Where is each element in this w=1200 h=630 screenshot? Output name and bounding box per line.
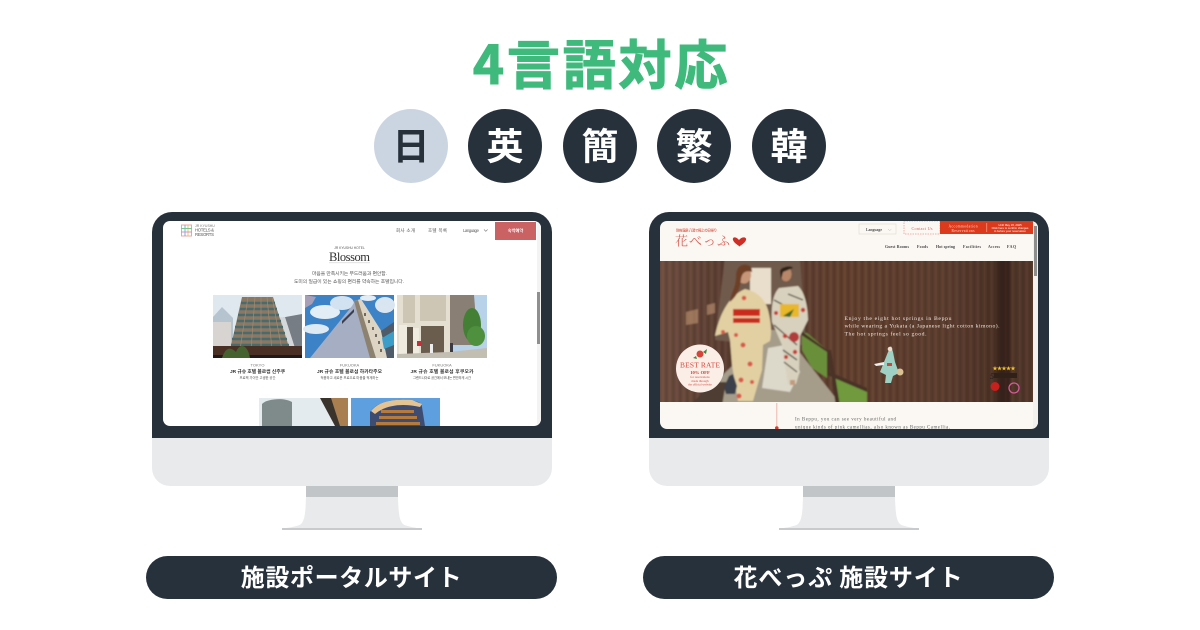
header buttons: Click here to confirm changes <box>992 226 1029 230</box>
language: English: 英 <box>486 116 524 170</box>
header buttons: Accommodation <box>948 224 978 228</box>
title: 4言語対応 <box>473 24 730 100</box>
description: 도미의 일급이 있는 쇼핑의 편리를 약속하는 호텔입니다. <box>294 278 404 285</box>
hotel photo: tower <box>259 398 348 426</box>
navigation: Language <box>463 228 479 233</box>
intro text: In Beppu, you can see very beautiful and <box>795 418 896 422</box>
language: Korean: 韓 <box>770 116 808 170</box>
hero caption: Enjoy the eight hot springs in Beppu <box>844 316 952 322</box>
badge: best rate: for reservations <box>690 375 710 379</box>
awards <box>990 366 1019 393</box>
hero caption: while wearing a Yukata (a Japanese light cotton kimono). <box>844 323 1000 330</box>
site navigation: Facilities <box>963 245 981 249</box>
hotel photo: Fukuoka Tenjin <box>397 295 487 358</box>
language selector <box>374 109 826 183</box>
hotel captions: 그랜드니아로 공간에서 보내는 편안하게 시간 <box>413 375 471 380</box>
site navigation: Hot spring <box>936 245 955 249</box>
site navigation: Guest Rooms <box>885 245 909 249</box>
header buttons <box>859 221 1033 234</box>
monitor stand <box>779 486 919 530</box>
hotel photo: Fukuoka Hakata <box>303 295 395 358</box>
hotel captions: 적용하고 새로운 프로으로 마음을 적게하는 <box>320 375 378 380</box>
hotel captions: TOKYO <box>251 362 264 368</box>
navigation: 호텔 목록 <box>428 227 447 234</box>
label: Hana Beppu site <box>643 556 1054 599</box>
intro text: unique kinds of pink camellias, also known as Beppu Camellia. <box>795 426 950 430</box>
header buttons: in before your reservation <box>994 229 1026 233</box>
scrollbar <box>1033 222 1038 429</box>
hero caption: The hot springs feel so good. <box>844 330 927 337</box>
hero photo <box>656 257 1037 406</box>
hotel captions: JR 규슈 호텔 블로섬 하카타주오 <box>317 368 383 375</box>
hotel photo: Tokyo <box>213 295 302 358</box>
right monitor <box>649 212 1049 530</box>
language: Japanese: 日 <box>392 116 430 170</box>
badge: best rate: BEST RATE <box>680 360 720 370</box>
hotel photo: harbor building <box>351 398 440 426</box>
navigation: 회사 소개 <box>396 227 415 234</box>
language: Simplified Chinese <box>563 109 637 183</box>
description: 마음을 만족시키는 부드러움과 편안함. <box>312 270 387 277</box>
site navigation: FAQ <box>1007 245 1016 249</box>
figure: woman in patterned yukata <box>772 266 808 385</box>
site navigation: Foods <box>917 245 928 249</box>
awards: ★★★★★ <box>992 366 1016 372</box>
label: portal site <box>146 556 557 599</box>
logo: RESORTS <box>195 232 214 237</box>
hotel captions <box>230 362 474 380</box>
hotel captions: FUKUOKA <box>340 362 359 368</box>
site logo: 別府温泉 八湯で極上の日帰り <box>676 228 717 232</box>
illustration: dancer <box>874 346 904 383</box>
language: Traditional Chinese <box>657 109 731 183</box>
monitor body <box>152 212 552 486</box>
header buttons: Reservations <box>952 229 975 233</box>
hero caption <box>844 316 1000 337</box>
brand heading: Blossom <box>329 250 370 264</box>
site navigation: Access <box>988 245 1000 249</box>
left monitor <box>152 212 552 530</box>
navigation: 숙박예약 <box>508 227 523 234</box>
logo <box>181 224 215 237</box>
badge: best rate: made through <box>691 379 709 383</box>
badge: best rate <box>676 344 724 392</box>
header buttons: Language <box>866 228 882 232</box>
scrollbar <box>537 222 541 426</box>
language: Traditional Chinese: 繁 <box>676 116 712 170</box>
header buttons: Contact Us <box>912 226 933 231</box>
language: Japanese <box>374 109 448 183</box>
logo: HOTELS & <box>195 228 214 232</box>
awards: 5 <box>990 372 994 381</box>
site logo <box>675 228 746 248</box>
label: Hana Beppu site: 花べっぷ 施設サイト <box>734 558 963 593</box>
intro text <box>795 418 950 430</box>
hotel captions: JR 규슈 호텔 블로섬 후쿠오카 <box>410 368 474 375</box>
hotel captions: FUKUOKA <box>432 362 452 368</box>
badge: best rate: 10% OFF <box>690 370 710 375</box>
description <box>294 270 404 284</box>
site navigation <box>885 245 1016 249</box>
timeline marker <box>775 403 779 430</box>
language: Korean <box>752 109 826 183</box>
language: English <box>468 109 542 183</box>
bag <box>724 374 737 394</box>
screen: portal site <box>163 221 541 426</box>
hotel captions: JR 규슈 호텔 블로썸 신주쿠 <box>230 368 286 375</box>
hotel captions: 프로젝 가이안 고생한 공간 <box>240 375 276 380</box>
site logo: 花べっふ <box>675 234 730 248</box>
navigation <box>396 222 536 240</box>
monitor body <box>649 212 1049 486</box>
monitor stand <box>282 486 422 530</box>
header buttons: Until May 26, 2025 <box>998 223 1022 227</box>
language: Simplified Chinese: 簡 <box>582 116 618 170</box>
screen: Hana Beppu site <box>656 221 1038 430</box>
brand heading: JR KYUSHU HOTEL <box>334 246 365 250</box>
logo: JR KYUSHU <box>195 224 215 228</box>
figure: woman in cream yukata <box>715 264 771 401</box>
label: portal site: 施設ポータルサイト <box>241 558 462 593</box>
badge: best rate: the official website <box>688 383 712 387</box>
